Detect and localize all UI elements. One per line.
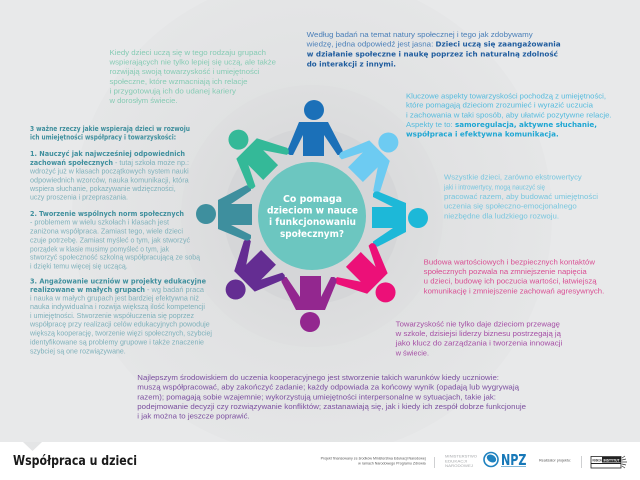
figure: pink person <box>333 241 411 320</box>
list item 1: - tutaj szkoła może np.: <box>115 158 189 167</box>
central circle question: i funkcjonowaniu <box>269 217 356 228</box>
list item 3: identyfikowane są problemy grupowe i także znaczenie <box>30 337 204 346</box>
list item 3: nauka indywidualna i rozwija większą ilość kompetencji <box>30 302 205 311</box>
text block: blue research finding: w działanie społeczne i naukę poprzez ich naturalną zdolność <box>307 49 559 58</box>
funding note: w ramach Narodowego Programu Zdrowia <box>358 462 426 466</box>
text block: purple sociability: Towarzyskość nie tylko daje dzieciom przewagę <box>396 319 560 328</box>
Fundacja Instytut logo: FUNDACJA <box>592 458 602 462</box>
ministry logo text: EDUKACJI <box>445 459 467 463</box>
central circle question: społecznym? <box>280 229 344 240</box>
figure: violet person <box>208 237 287 315</box>
list item 3: - wg badań praca <box>147 285 205 294</box>
text block: blue research finding: Dzieci uczą się zaangażowania <box>436 40 561 49</box>
text block: violet best environment: podejmowanie decyzji czy rozwiązywanie konfliktów; zastanawiają się, jak i kiedy ich zespół dobrze funkcjonuje <box>137 402 526 411</box>
text block: blue research finding <box>306 30 561 68</box>
list item 2 <box>30 209 201 270</box>
text block: light cyan all children: niezbędne dla ludzkiego rozwoju. <box>444 211 559 220</box>
text block: purple sociability: w świecie. <box>395 348 429 357</box>
text block: green intro: w dorosłym świecie. <box>108 96 178 105</box>
text block: blue research finding: wiedzę, jedna odpowiedź jest jasna: <box>306 40 433 49</box>
list item 3: i umiejętności. Stworzenie współuczenia się poprzez <box>30 311 194 320</box>
Fundacja Instytut logo <box>581 456 627 468</box>
text block: green intro: społeczne, które wzmacniają ich relacje <box>110 77 248 86</box>
text block: violet best environment: i jak można to jeszcze poprawić. <box>137 412 250 421</box>
text block: cyan key aspects: samoregulacja, aktywne słuchanie, <box>455 120 597 129</box>
figure: green person <box>213 112 291 191</box>
list item 1: wdrożyć już w klasach początkowych system nauki <box>29 166 189 175</box>
Fundacja Instytut logo: INSTYTUT <box>604 458 620 462</box>
text block: cyan key aspects: Aspekty te to: <box>406 120 453 129</box>
text block: purple sociability: w szkole, dzisiejsi liderzy biznesu postrzegają ją <box>395 329 562 338</box>
ministry logo text <box>434 454 477 468</box>
text block: green intro: wspierających nie tylko lepiej się uczą, ale także <box>108 58 276 67</box>
ministry logo text: NARODOWEJ <box>445 464 473 468</box>
funding note: Projekt finansowany ze środków Ministerstwa Edukacji Narodowej <box>321 456 426 460</box>
list item 3: większą kooperację, tworzenie więzi społecznych, szybciej <box>29 329 212 338</box>
list item 2: porządek w klasie musimy pomyśleć o tym, jak <box>30 244 169 253</box>
central circle question: Co pomaga <box>283 194 342 205</box>
list item 1: zachowań społecznych <box>30 158 113 167</box>
text block: purple sociability: jako klucz do zarządzania i tworzenia innowacji <box>395 339 563 348</box>
list item 3: i nauka w małych grupach jest bardziej efektywna niż <box>30 293 199 302</box>
list heading: 3 ważne rzeczy jakie wspierają dzieci w rozwoju <box>30 125 190 133</box>
text block: pink safe contacts: u dzieci, budowę ich poczucia wartości, łatwiejszą <box>424 277 597 286</box>
list item 2: zaniżona współpraca. Zamiast tego, wiele dzieci <box>30 226 183 235</box>
text block: green intro: i przygotowują ich do udanej kariery <box>110 86 236 95</box>
list item 3: 3. Angażowanie uczniów w projekty edukacyjne <box>30 276 206 286</box>
NPZ logo: NPZ <box>501 451 527 469</box>
text block: light cyan all children <box>443 173 598 220</box>
list heading: ich umiejętności współpracy i towarzyskości: <box>30 134 176 142</box>
text block: green intro <box>108 48 276 105</box>
figure: light blue person <box>337 117 416 195</box>
NPZ logo <box>484 451 527 469</box>
text block: pink safe contacts <box>424 257 604 295</box>
list item 3 <box>29 276 212 355</box>
list heading <box>30 125 190 142</box>
text block: light cyan all children: jaki i introwertycy, mogą nauczyć się <box>443 182 545 191</box>
text block: green intro: rozwijają swoją towarzyskość i umiejętności <box>110 67 260 76</box>
list item 3: współpracę przy realizacji celów edukacyjnych powoduje <box>29 320 210 329</box>
text block: violet best environment <box>137 373 526 421</box>
figure: teal person <box>196 185 252 241</box>
central circle question <box>258 162 366 270</box>
list item 2: i dzięki temu więcej się uczącą. <box>30 261 128 270</box>
text block: cyan key aspects: współpraca i efektywna komunikacja. <box>406 130 559 139</box>
text block: blue research finding: do interakcji z innymi. <box>307 59 396 68</box>
ministry logo text: MINISTERSTWO <box>445 454 477 458</box>
text block: pink safe contacts: Budowa wartościowych i bezpiecznych kontaktów <box>424 257 596 266</box>
text block: violet best environment: Najlepszym środowiskiem do uczenia kooperacyjnego jest stworzenie takich warunków kiedy uczniowie: <box>137 373 499 382</box>
list item 2: - problemem w wielu szkołach i klasach jest <box>30 217 170 226</box>
list item 2: 2. Tworzenie wspólnych norm społecznych <box>30 209 184 218</box>
text block: violet best environment: muszą współpracować, aby zakończyć zadanie; każdy odpowiada za końcowy wynik (opadają lub wygrywają <box>137 383 520 392</box>
list item 1: odpowiednich wzorców, nauka komunikacji, która <box>30 175 189 184</box>
project contractor label: Realizator projektu: <box>539 458 571 462</box>
text block: three things list <box>29 125 212 355</box>
text block: pink safe contacts: społecznych pozwala na zmniejszenie napięcia <box>424 267 587 276</box>
list item 1: wspiera słuchanie, pokazywanie wdzięczności, <box>29 184 176 193</box>
text block: purple sociability <box>395 319 563 357</box>
text block: pink safe contacts: komunikację i zmniejszenie zachowań agresywnych. <box>424 286 604 295</box>
text block: light cyan all children: uczenia się społeczno-emocjonalnego <box>444 202 577 211</box>
figure: cyan person <box>372 191 428 247</box>
text block: green intro: Kiedy dzieci uczą się w tego rodzaju grupach <box>110 48 266 57</box>
footer band <box>0 442 640 480</box>
text block: light cyan all children: Wszystkie dzieci, zarówno ekstrowertycy <box>444 173 582 182</box>
text block: violet best environment: razem); pomagają sobie wzajemnie; wykorzystują umiejętności interpersonalne w sytuacjach, takie jak: <box>137 392 496 401</box>
list item 2: czuje potrzebę. Zamiast myśleć o tym, jak stworzyć <box>30 235 190 244</box>
funding note <box>321 456 426 466</box>
central circle question: dzieciom w nauce <box>267 206 358 216</box>
figure: magenta person <box>281 276 337 332</box>
text block: cyan key aspects: i zachowania w taki sposób, aby ułatwić pozytywne relacje. <box>406 110 612 119</box>
list item 1: uczy proszenia i przepraszania. <box>30 193 128 202</box>
text block: cyan key aspects: które pomagają dzieciom zrozumieć i wyrazić uczucia <box>406 101 594 110</box>
list item 1: 1. Nauczyć jak najwcześniej odpowiednich <box>30 149 185 158</box>
list item 2: stworzyć społeczność szkolną współpracującą ze sobą <box>30 253 201 262</box>
text block: light cyan all children: pracować razem, aby budować umiejętności <box>444 192 598 201</box>
figure: dark blue person <box>287 100 343 156</box>
list item 1 <box>29 149 189 202</box>
list item 3: szybciej są one rozwiązywane. <box>30 346 126 355</box>
list item 3: realizowane w małych grupach <box>30 285 145 294</box>
footer title: Współpraca u dzieci <box>13 453 137 469</box>
text block: cyan key aspects <box>406 91 612 139</box>
text block: blue research finding: Według badań na temat natury społecznej i tego jak zdobywamy <box>307 30 533 39</box>
text block: cyan key aspects: Kluczowe aspekty towarzyskości pochodzą z umiejętności, <box>406 91 606 100</box>
